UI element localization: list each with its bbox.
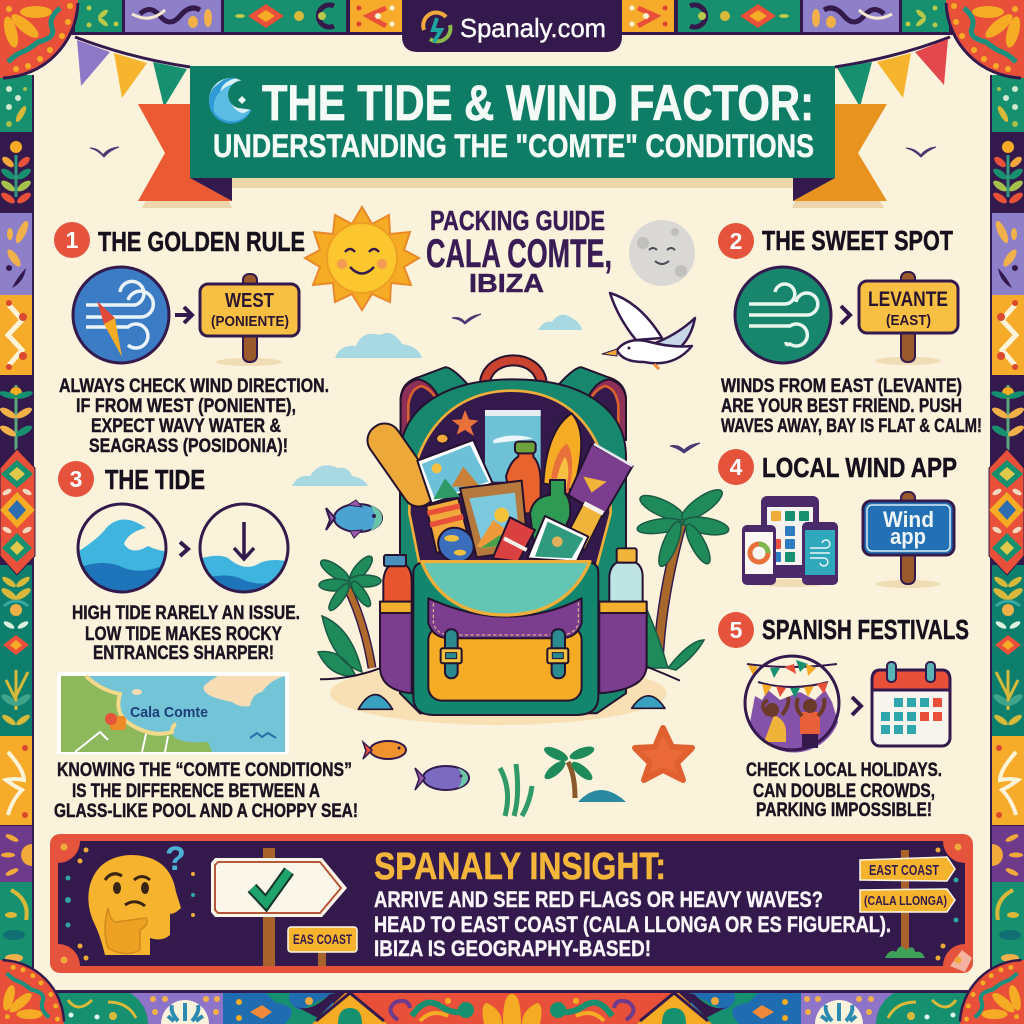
arrow xyxy=(175,307,192,323)
icon: question mark: ? xyxy=(165,840,186,878)
text: sweet spot body: WINDS FROM EAST (LEVANTE) xyxy=(721,375,962,397)
rock xyxy=(632,696,665,708)
icon: starfish xyxy=(635,728,692,780)
dots xyxy=(60,844,962,964)
title banner xyxy=(138,66,887,208)
section 5: spanish festivals xyxy=(718,612,969,821)
front pocket xyxy=(413,563,598,715)
sign: wind app xyxy=(863,492,954,588)
sign: levante xyxy=(859,272,958,365)
ribbon left xyxy=(138,104,232,208)
handle xyxy=(485,360,542,382)
text: comte conditions: KNOWING THE “COMTE CONDITIONS” xyxy=(57,759,352,781)
sign: west xyxy=(200,274,299,366)
palm tree left xyxy=(318,553,381,676)
section 1: the golden rule xyxy=(54,222,329,457)
title banner: UNDERSTANDING THE "COMTE" CONDITIONS xyxy=(213,128,814,164)
sign: levante: LEVANTE xyxy=(868,288,948,311)
sign: wind app: app xyxy=(890,524,926,549)
icon: wind compass xyxy=(73,267,169,363)
text: golden rule body xyxy=(59,375,329,457)
sign: checkmark xyxy=(211,848,347,966)
rocks xyxy=(358,695,393,709)
purple flap xyxy=(428,598,582,638)
text: festivals body xyxy=(746,759,942,821)
section 2: the sweet spot: THE SWEET SPOT xyxy=(762,225,953,256)
text: tide body: ENTRANCES SHARPER! xyxy=(93,642,274,664)
sign: west: (PONIENTE) xyxy=(211,313,289,330)
text: golden rule body: IF FROM WEST (PONIENTE), xyxy=(76,395,296,417)
number badge 4: 4 xyxy=(730,454,743,480)
buckles xyxy=(441,629,568,678)
bunting left xyxy=(75,37,190,107)
icon: wind xyxy=(735,267,831,363)
signpost: east coast, cala llonga: (CALA LLONGA) xyxy=(864,893,947,908)
text: insight heading: SPANALY INSIGHT: xyxy=(374,846,666,888)
icon: low tide arrow xyxy=(198,502,290,594)
sign: wind app: Wind xyxy=(883,507,934,532)
bird xyxy=(906,147,936,157)
contents xyxy=(361,410,633,569)
icon: smiling sun xyxy=(305,207,419,310)
section 4: local wind app: LOCAL WIND APP xyxy=(762,452,957,483)
sign: eas coast: EAS COAST xyxy=(293,931,352,947)
section 2: the sweet spot xyxy=(718,223,982,437)
text: golden rule body: EXPECT WAVY WATER & xyxy=(91,415,281,437)
section 4: local wind app xyxy=(718,449,957,588)
ribbon right xyxy=(792,104,887,208)
number badge 3: 3 xyxy=(70,466,82,492)
icon: wave xyxy=(209,78,254,123)
number badge 5: 5 xyxy=(730,617,743,643)
number badge 4 xyxy=(718,449,754,485)
teal flap xyxy=(422,562,590,615)
text: sweet spot body: ARE YOUR BEST FRIEND. PUSH xyxy=(721,395,962,417)
text: comte conditions xyxy=(54,759,358,822)
title banner: THE TIDE & WIND FACTOR: xyxy=(262,75,814,131)
clouds xyxy=(292,315,582,486)
number badge 2 xyxy=(718,223,754,259)
icon: fish xyxy=(326,500,382,538)
small palm island xyxy=(542,744,626,802)
text: tide body: LOW TIDE MAKES ROCKY xyxy=(85,623,282,645)
body xyxy=(400,379,626,713)
icon: festival crowd xyxy=(745,656,839,752)
arrow xyxy=(841,306,850,324)
sign: eas coast xyxy=(288,927,357,966)
corner glow xyxy=(950,950,972,972)
number badge 1: 1 xyxy=(66,227,79,253)
text: festivals body: CHECK LOCAL HOLIDAYS. xyxy=(746,759,942,781)
text: insight body: HEAD TO EAST COAST (CALA LLONGA OR ES FIGUERAL). xyxy=(374,912,891,937)
icon: fish 2 xyxy=(363,741,406,759)
palm tree right xyxy=(636,485,730,670)
text: sweet spot body xyxy=(721,375,982,437)
icon: devices xyxy=(742,496,838,587)
bird xyxy=(670,443,700,453)
bird xyxy=(90,147,119,157)
number badge 1 xyxy=(54,222,90,258)
section 3: the tide xyxy=(58,461,300,664)
text: tide body: HIGH TIDE RARELY AN ISSUE. xyxy=(72,602,300,624)
signpost: east coast, cala llonga xyxy=(860,850,955,958)
opening xyxy=(409,391,611,567)
text: insight body: IBIZA IS GEOGRAPHY-BASED! xyxy=(374,936,651,961)
map: Cala Comte xyxy=(57,672,289,754)
center heading: CALA COMTE, xyxy=(426,232,612,276)
sand xyxy=(330,662,667,725)
number badge 5 xyxy=(718,612,754,648)
side pocket right with bottle xyxy=(599,548,647,693)
section 1: the golden rule: THE GOLDEN RULE xyxy=(98,226,305,257)
number badge 2: 2 xyxy=(730,228,742,254)
sign: west: WEST xyxy=(225,290,274,312)
text: comte conditions: IS THE DIFFERENCE BETWEEN A xyxy=(72,780,320,802)
center heading: PACKING GUIDE xyxy=(430,205,605,236)
icon: calendar xyxy=(872,662,950,746)
icon: seaweed xyxy=(500,764,532,816)
sign: levante: (EAST) xyxy=(886,312,931,329)
number badge 3 xyxy=(58,461,94,497)
icon: seagull xyxy=(602,293,695,369)
text: golden rule body: ALWAYS CHECK WIND DIRECTION. xyxy=(59,375,329,397)
text: tide body xyxy=(72,602,300,664)
bunting right xyxy=(835,37,950,107)
icon: high tide wave xyxy=(76,502,168,594)
center heading xyxy=(426,205,612,298)
text: comte conditions: GLASS-LIKE POOL AND A CHOPPY SEA! xyxy=(54,800,358,822)
panel: spanaly insight xyxy=(50,834,973,973)
arrow xyxy=(852,697,861,715)
yellow pocket xyxy=(428,627,582,701)
text: insight body xyxy=(374,887,891,961)
icon: thinking face xyxy=(88,855,181,955)
bird xyxy=(452,314,481,324)
side pocket left with bottle xyxy=(380,555,412,693)
map: Cala Comte: Cala Comte xyxy=(130,704,208,721)
logo pill: Spanaly.com: Spanaly.com xyxy=(460,13,606,43)
logo pill: Spanaly.com xyxy=(402,0,622,52)
center heading: IBIZA xyxy=(469,268,544,298)
signpost: east coast, cala llonga: EAST COAST xyxy=(869,862,939,879)
text: insight body: ARRIVE AND SEE RED FLAGS OR HEAVY WAVES? xyxy=(374,887,823,912)
text: golden rule body: SEAGRASS (POSIDONIA)! xyxy=(89,435,288,457)
icon: logo swirl xyxy=(423,13,450,42)
arrow xyxy=(180,542,188,556)
section 3: the tide: THE TIDE xyxy=(105,464,205,495)
backpack xyxy=(320,360,680,725)
icon: moon xyxy=(629,220,695,286)
text: festivals body: CAN DOUBLE CROWDS, xyxy=(753,780,935,802)
straps xyxy=(401,367,626,440)
text: festivals body: PARKING IMPOSSIBLE! xyxy=(756,799,932,821)
icon: fish 3 xyxy=(415,766,469,790)
